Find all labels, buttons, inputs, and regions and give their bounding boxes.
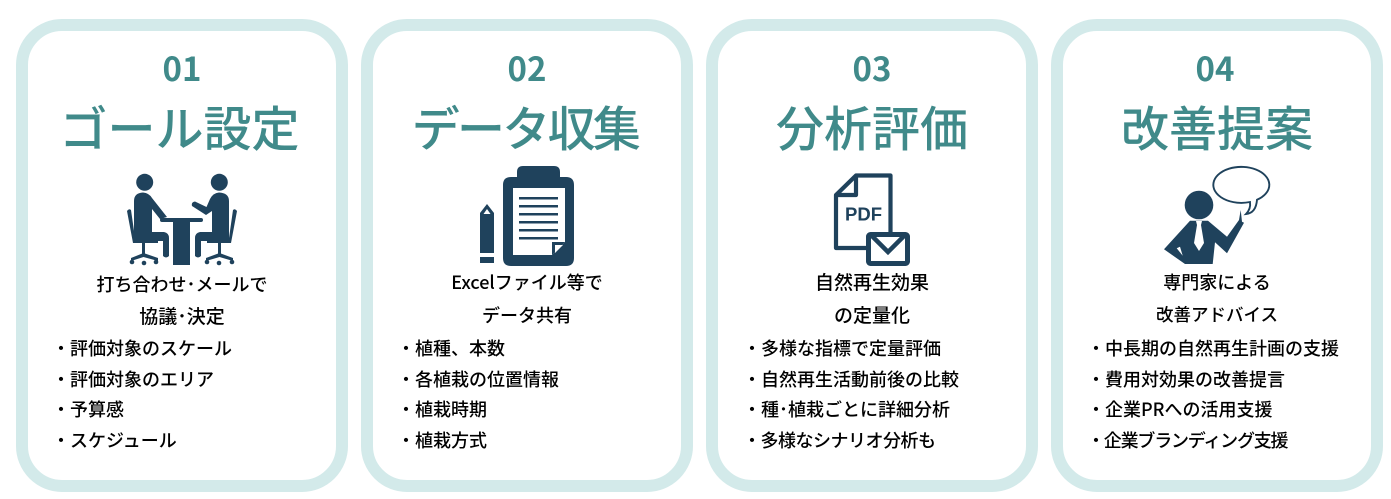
- subheading: Excelファイル等で: [451, 269, 603, 295]
- subheading line 2: データ共有: [482, 302, 572, 328]
- icon: two people meeting at a table: [127, 174, 237, 266]
- subheading line 2: 改善アドバイス: [1156, 302, 1278, 327]
- subheading: 専門家による: [1163, 269, 1271, 295]
- bullet list: ・中長期の自然再生計画の支援: [1087, 335, 1339, 361]
- bullet list: ・多様な指標で定量評価: [743, 335, 941, 361]
- heading: improvement proposal: 改善提案: [1121, 90, 1313, 160]
- bullet list: [397, 335, 559, 453]
- icon: expert with speech bubble: [1164, 166, 1270, 264]
- panel: 04 improvement proposal: [1051, 19, 1383, 492]
- subheading: 打ち合わせ･メールで: [96, 271, 268, 297]
- heading: data collection: データ収集: [412, 90, 638, 160]
- step number 02: 02: [508, 43, 546, 91]
- bullet list: ・評価対象のスケール: [52, 335, 232, 361]
- bullet list: ・予算感: [52, 396, 124, 422]
- subheading: 自然再生効果: [815, 268, 929, 295]
- bullet list: [743, 335, 959, 453]
- bullet list: ・各植栽の位置情報: [397, 366, 559, 392]
- icon: PDF document with envelope: [834, 173, 910, 266]
- bullet list: ・企業ブランディング支援: [1087, 427, 1287, 453]
- heading: goal setting: ゴール設定: [59, 90, 300, 160]
- panel: 01 goal setting: [16, 19, 348, 492]
- subheading line 2: 協議･決定: [139, 302, 225, 329]
- panel: 03 analysis and evaluation: [706, 19, 1038, 492]
- bullet list: ・種･植栽ごとに詳細分析: [743, 396, 950, 422]
- bullet list: [52, 335, 232, 453]
- bullet list: ・自然再生活動前後の比較: [743, 366, 959, 392]
- bullet list: [1087, 335, 1339, 453]
- bullet list: ・企業PRへの活用支援: [1087, 396, 1272, 422]
- icon: PDF document with envelope: PDF: [845, 204, 882, 224]
- heading: analysis and evaluation: 分析評価: [776, 90, 968, 160]
- step number 03: 03: [853, 43, 891, 91]
- bullet list: ・スケジュール: [52, 427, 177, 453]
- icon: clipboard and pencil: [480, 166, 574, 266]
- bullet list: ・費用対効果の改善提言: [1087, 366, 1285, 392]
- step number 01: 01: [163, 43, 201, 91]
- subheading line 2: の定量化: [834, 301, 910, 328]
- panel: 02 data collection: [361, 19, 693, 492]
- bullet list: ・植栽時期: [397, 396, 487, 422]
- bullet list: ・植種、本数: [397, 335, 505, 361]
- bullet list: ・評価対象のエリア: [52, 366, 214, 392]
- bullet list: ・多様なシナリオ分析も: [743, 427, 936, 453]
- step number 04: 04: [1196, 43, 1234, 91]
- bullet list: ・植栽方式: [397, 427, 487, 453]
